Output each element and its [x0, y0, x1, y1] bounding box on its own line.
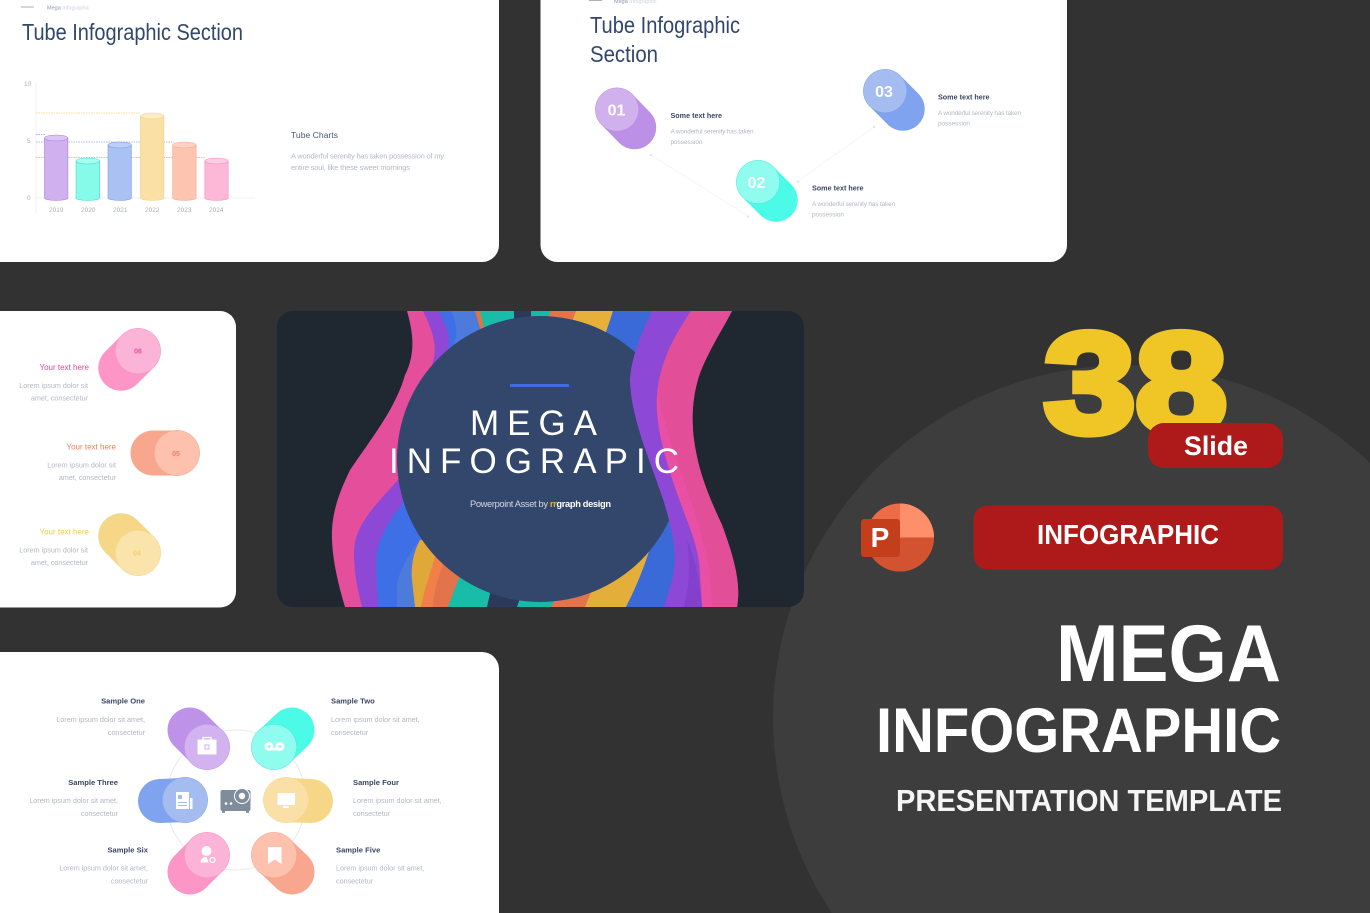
tube 02: 02	[748, 175, 766, 192]
text: sample three: consectetur	[81, 809, 119, 818]
text: item 06: Your text here	[39, 363, 90, 372]
tube 03	[863, 69, 907, 113]
text: item 03: Some text here	[938, 92, 990, 102]
panel: side tube slide	[0, 311, 236, 608]
text block: tube charts	[291, 130, 444, 172]
tube 04	[115, 530, 161, 576]
text: item 03	[938, 92, 1021, 128]
text block: tube charts: A wonderful serenity has taken possession of my	[291, 152, 444, 160]
text: item 06	[19, 363, 90, 402]
text: sample four: Lorem ipsum dolor sit amet,	[353, 796, 442, 805]
text: sample six	[59, 846, 149, 886]
text: sample one	[56, 696, 146, 737]
bar chart: 2024	[209, 207, 224, 214]
text: sample six: consectetur	[111, 876, 149, 886]
bar chart: 10	[24, 81, 32, 88]
bar chart: 2021	[113, 207, 128, 214]
text: item 03: A wonderful serenity has taken	[938, 110, 1021, 117]
tube: sample six	[184, 832, 230, 878]
tube: sample five	[251, 832, 297, 878]
text: item 05	[47, 442, 117, 482]
icon: powerpoint: P	[871, 522, 889, 553]
panel: tube chart slide	[0, 0, 499, 262]
text: item 01: A wonderful serenity has taken	[670, 128, 754, 136]
panel: six tube slide	[0, 652, 499, 913]
icon: powerpoint	[861, 504, 934, 572]
text: item 02	[812, 184, 895, 218]
text: sample three: Sample Three	[68, 778, 118, 787]
text: item 05: Your text here	[66, 442, 117, 452]
text: item 02: Some text here	[812, 184, 864, 192]
heading: tube infographic section: Tube Infographic Section	[22, 19, 243, 45]
text: item 04	[19, 528, 90, 567]
slide tag: Mega Infographic	[47, 6, 90, 12]
bar chart: 2019	[49, 207, 64, 214]
background circle	[773, 365, 1370, 913]
tube 06	[115, 328, 161, 374]
text: sample one: consectetur	[108, 728, 146, 737]
text: sample four: Sample Four	[353, 778, 399, 787]
bar chart: 0	[27, 195, 31, 202]
text: sample five: Sample Five	[336, 846, 380, 854]
tube: sample two	[251, 724, 297, 770]
text: item 06: amet, consectetur	[31, 394, 89, 402]
text: item 06: Lorem ipsum dolor sit	[19, 381, 88, 390]
bar chart	[24, 81, 255, 214]
text: sample five	[336, 846, 425, 886]
text: sample three	[29, 778, 119, 818]
heading: mega: MEGA	[1056, 609, 1281, 699]
centre subtitle: Powerpoint Asset by rrgraph design	[470, 499, 611, 509]
text: sample one: Sample One	[101, 696, 145, 706]
tube: sample one	[184, 724, 230, 770]
heading: tube infographic section	[590, 12, 740, 67]
text block: tube charts: entire soul, like these sweet mornings	[291, 163, 410, 172]
centre title text	[389, 404, 679, 481]
text: item 05: amet, consectetur	[59, 473, 117, 482]
icon: projector	[220, 788, 250, 813]
colourful waves	[332, 311, 738, 607]
heading: tube infographic section: Section	[590, 41, 658, 67]
text: item 01: possession	[670, 139, 703, 146]
badge: slide	[1148, 423, 1283, 468]
subheading: presentation template: PRESENTATION TEMPLATE	[896, 783, 1282, 818]
centre blob	[397, 316, 683, 602]
badge: slide: Slide	[1184, 431, 1248, 461]
right waves overlap	[630, 311, 702, 607]
text: item 04: amet, consectetur	[31, 558, 89, 567]
text: item 05: Lorem ipsum dolor sit	[47, 460, 116, 470]
text: sample four	[353, 778, 442, 818]
tube 03: 03	[875, 84, 893, 101]
text block: tube charts: Tube Charts	[291, 130, 338, 140]
text: item 04: Lorem ipsum dolor sit	[19, 546, 88, 554]
text: item 03: possession	[938, 120, 970, 128]
text: item 01	[670, 111, 754, 146]
centre title text: MEGA	[470, 404, 598, 443]
badge: infographic	[974, 506, 1283, 570]
text: item 04: Your text here	[39, 528, 90, 536]
tube: sample three	[160, 777, 208, 823]
tube 01	[595, 88, 639, 131]
tube 05	[153, 430, 200, 476]
text: sample two: Lorem ipsum dolor sit amet,	[331, 715, 420, 724]
number: 38: 38	[1044, 304, 1227, 463]
text: sample two	[331, 696, 420, 737]
text: sample four: consectetur	[353, 809, 391, 818]
tube 05: 05	[172, 451, 180, 458]
text: sample five: consectetur	[336, 876, 374, 886]
bar chart: 2022	[145, 207, 160, 214]
badge: infographic: INFOGRAPHIC	[1037, 519, 1219, 550]
panel: numbered tube slide	[540, 0, 1067, 262]
text: sample three: Lorem ipsum dolor sit amet,	[29, 796, 118, 805]
tube 06: 06	[134, 348, 142, 356]
panel: centre title slide	[277, 311, 804, 607]
bar chart: 2020	[81, 207, 96, 214]
heading: infographic: INFOGRAPHIC	[876, 696, 1281, 766]
tube: sample four	[263, 777, 311, 823]
tube 01: 01	[608, 102, 626, 120]
text: item 02: A wonderful serenity has taken	[812, 201, 895, 208]
text: item 02: possession	[812, 212, 844, 218]
text: sample two: consectetur	[331, 728, 369, 737]
tube 02	[736, 160, 780, 204]
text: sample two: Sample Two	[331, 696, 375, 706]
tube 04: 04	[133, 550, 141, 558]
bar chart: 5	[27, 138, 31, 145]
text: sample six: Lorem ipsum dolor sit amet,	[59, 864, 148, 872]
text: item 01: Some text here	[670, 111, 722, 120]
heading: tube infographic section: Tube Infographic	[590, 12, 740, 38]
centre title text: INFOGRAPIC	[389, 442, 679, 481]
text: sample five: Lorem ipsum dolor sit amet,	[336, 864, 425, 872]
text: sample one: Lorem ipsum dolor sit amet,	[56, 715, 145, 724]
bar chart: 2023	[177, 207, 192, 214]
text: sample six: Sample Six	[107, 846, 149, 854]
